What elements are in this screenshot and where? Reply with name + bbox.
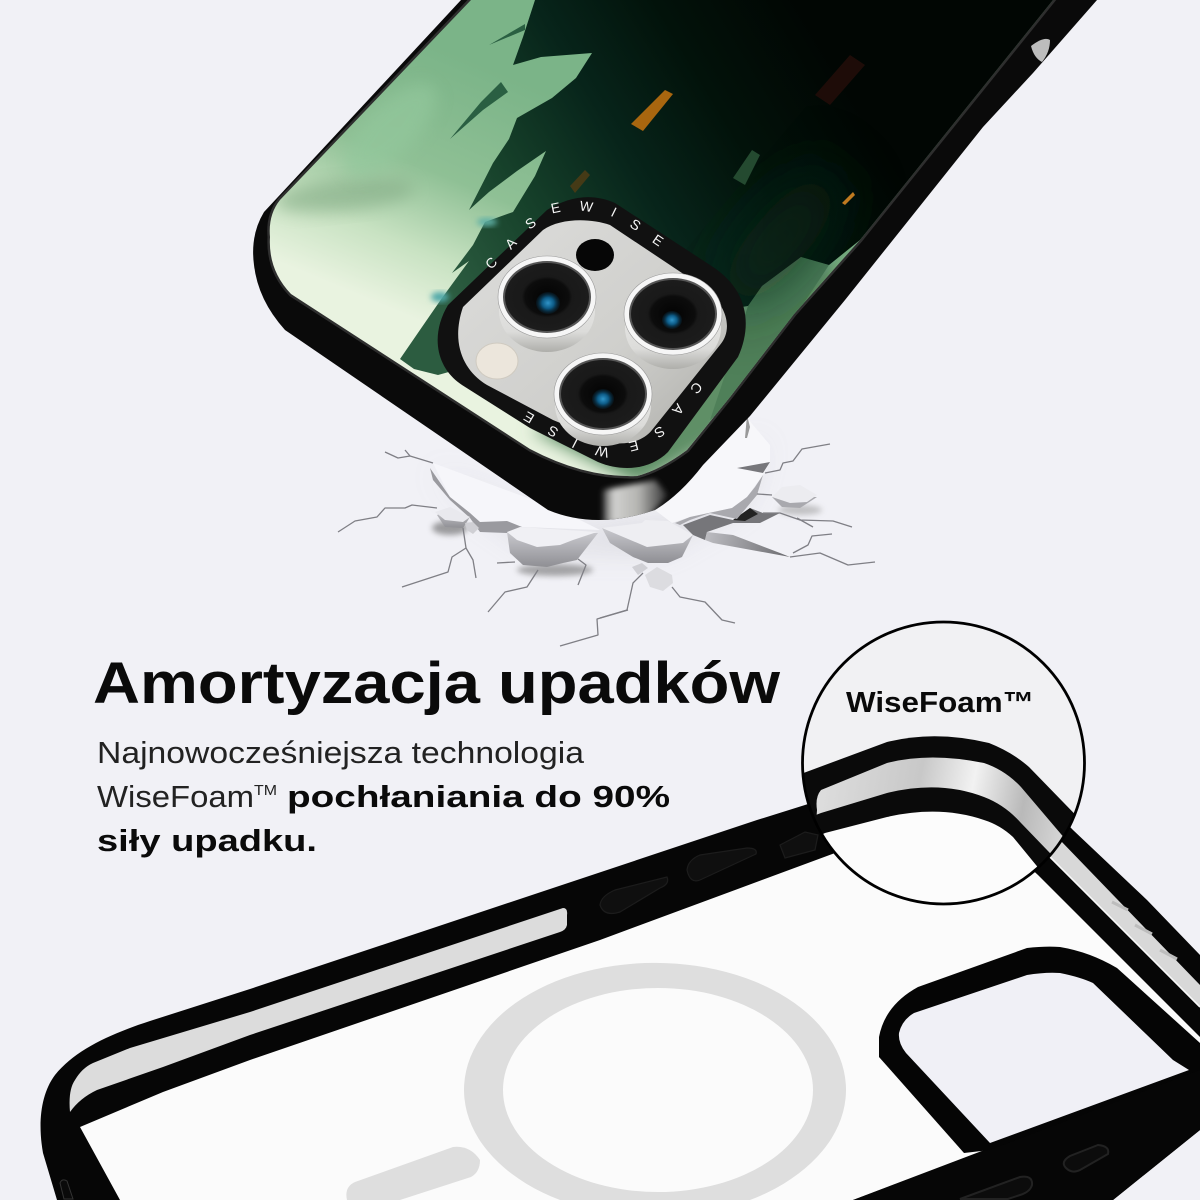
- illustration: clear case back: [41, 769, 1200, 1200]
- amber window: [631, 90, 673, 131]
- top sliver: [745, 415, 750, 438]
- lower green strip: [530, 260, 840, 485]
- left fracture wall: [430, 468, 522, 533]
- dim windows: [570, 170, 590, 193]
- flash: [476, 343, 518, 379]
- rock: large left: [507, 527, 598, 567]
- fracture gap right: [683, 508, 780, 540]
- transparent interior: [80, 830, 1200, 1200]
- rock: centre: [602, 520, 693, 591]
- description text: TM: [254, 782, 277, 799]
- description text: [97, 735, 670, 858]
- magnified foam layers: [804, 736, 1074, 902]
- corner highlight: [603, 480, 668, 524]
- triangular fissure: [737, 462, 770, 473]
- camera plate: [458, 220, 727, 443]
- illustration: cracked surface: [338, 415, 875, 646]
- soft shadow under phone: [430, 440, 760, 545]
- teal glow: [431, 292, 449, 302]
- magnified detail: WiseFoam circle: [790, 622, 1100, 905]
- black case body: [253, 0, 1097, 520]
- rock: small right: [772, 485, 817, 508]
- mic hole: [576, 239, 614, 271]
- description text: WiseFoam: [97, 779, 245, 814]
- right dim green: [744, 184, 858, 340]
- side button highlight: [1031, 39, 1050, 62]
- rock: small left: [435, 507, 479, 534]
- description text: Najnowocześniejsza technologia: [97, 735, 585, 770]
- left side slit: [60, 1180, 73, 1199]
- camera cutout opening: [899, 973, 1189, 1143]
- case black frame: [41, 769, 1200, 1200]
- lens: right: [624, 273, 722, 369]
- foam channel: right side: [1050, 840, 1200, 1007]
- brand text: top arc: CASEWISE: [486, 200, 664, 268]
- right lit patch: [710, 257, 829, 420]
- foam channel: long side: [70, 908, 567, 1112]
- lower right wedge: [705, 532, 790, 557]
- lens: bottom: [554, 353, 652, 446]
- description text: pochłaniania do 90%: [287, 779, 670, 814]
- haze band: [274, 172, 416, 218]
- raised plate right: [655, 418, 770, 523]
- lens: top: [498, 256, 596, 352]
- magnet alignment pill: [346, 1147, 480, 1200]
- plate right edge: [675, 475, 763, 525]
- description text: siły upadku.: [97, 823, 317, 858]
- inner rim: [270, 0, 1053, 476]
- title: Amortyzacja upadków: [93, 651, 781, 716]
- raised plate left: [433, 463, 600, 530]
- back artwork: [270, 0, 1053, 476]
- camera cutout frame: [879, 947, 1200, 1153]
- crack lines: [338, 444, 875, 646]
- bottom port icon: [960, 1145, 1108, 1199]
- magnet ring: [464, 963, 846, 1200]
- bottom edge band: [853, 1068, 1200, 1200]
- spires: [450, 24, 525, 139]
- channel highlight lines: [1050, 857, 1200, 1007]
- side buttons: [600, 832, 818, 913]
- dark castle silhouette: [400, 0, 1060, 375]
- label: WiseFoam™: [846, 687, 1034, 719]
- illustration: dropped phone in case: [253, 0, 1097, 520]
- brand text: bottom arc: CASEWISE: [523, 383, 702, 458]
- dark gap: [733, 508, 758, 521]
- rock shadows: [432, 505, 822, 576]
- camera bumper: [438, 197, 746, 468]
